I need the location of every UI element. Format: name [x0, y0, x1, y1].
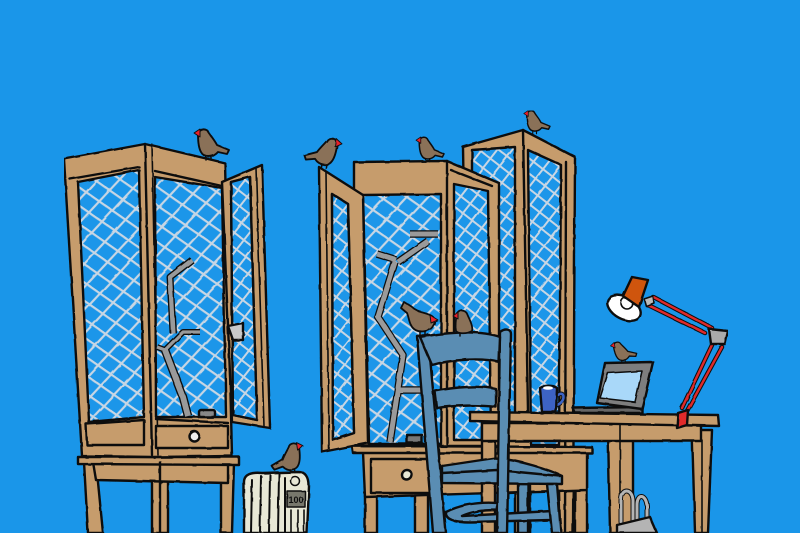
- bird on cage 2 door: [303, 135, 342, 170]
- cage 1: left cabinet with open door: [64, 144, 270, 533]
- mug: [540, 386, 564, 412]
- cage 1 table: [78, 457, 239, 533]
- cage 1 left mesh panel: [78, 170, 144, 422]
- cage 2 perch branch: [377, 234, 438, 442]
- lamp arms: [648, 297, 722, 411]
- chair stretcher: [446, 503, 552, 522]
- laptop: [573, 362, 653, 413]
- lamp clamp: [677, 410, 688, 428]
- bird on cage 2: [416, 137, 444, 162]
- desk lamp: [603, 277, 728, 428]
- radiator: [244, 472, 309, 533]
- cage 1 food dish: [199, 410, 215, 417]
- chair front leg: [547, 484, 561, 533]
- desk: [470, 412, 719, 533]
- bird on laptop: [610, 339, 638, 365]
- bird on chair left: [401, 302, 438, 336]
- cage 3 left mesh panel: [472, 147, 515, 440]
- laptop screen: [600, 371, 642, 402]
- cage 2 open door: [319, 167, 368, 452]
- chair middle slat: [435, 387, 496, 408]
- lamp joint: [709, 329, 728, 344]
- chair left post: [417, 335, 446, 533]
- bird on chair right: [453, 310, 472, 336]
- cage 2 drawer: [371, 459, 435, 493]
- bird on radiator: [269, 442, 306, 476]
- cage 1 drawer: [156, 426, 228, 448]
- cage 3: back cabinet: [463, 130, 575, 533]
- cage 1 open door: [222, 165, 270, 428]
- bird on cage 3: [524, 110, 550, 134]
- cage 2: centre cabinet: [354, 161, 499, 446]
- cage 2 table: [352, 446, 592, 533]
- lamp light: [603, 290, 645, 326]
- cage 1 centre mesh panel: [155, 177, 226, 417]
- cage 1 perch branch: [157, 260, 200, 416]
- chair right post: [497, 330, 511, 533]
- radiator: 100: [288, 495, 304, 505]
- cage 3 right mesh panel: [528, 150, 561, 445]
- handbag: [617, 491, 657, 533]
- cage 2 right mesh panel: [454, 184, 491, 440]
- chair: [417, 330, 562, 533]
- cage 2 food dish: [407, 435, 422, 443]
- cage 1 water cup: [228, 323, 243, 340]
- cage 2 centre mesh panel: [363, 194, 441, 444]
- cage 1 cabinet body: [64, 144, 232, 457]
- chair seat: [442, 458, 562, 484]
- bird on cage 1: [194, 129, 229, 160]
- lamp arm mount: [644, 296, 654, 306]
- chair top slat: [420, 332, 500, 365]
- lamp shade: [623, 277, 648, 307]
- chair rear legs: [518, 483, 530, 533]
